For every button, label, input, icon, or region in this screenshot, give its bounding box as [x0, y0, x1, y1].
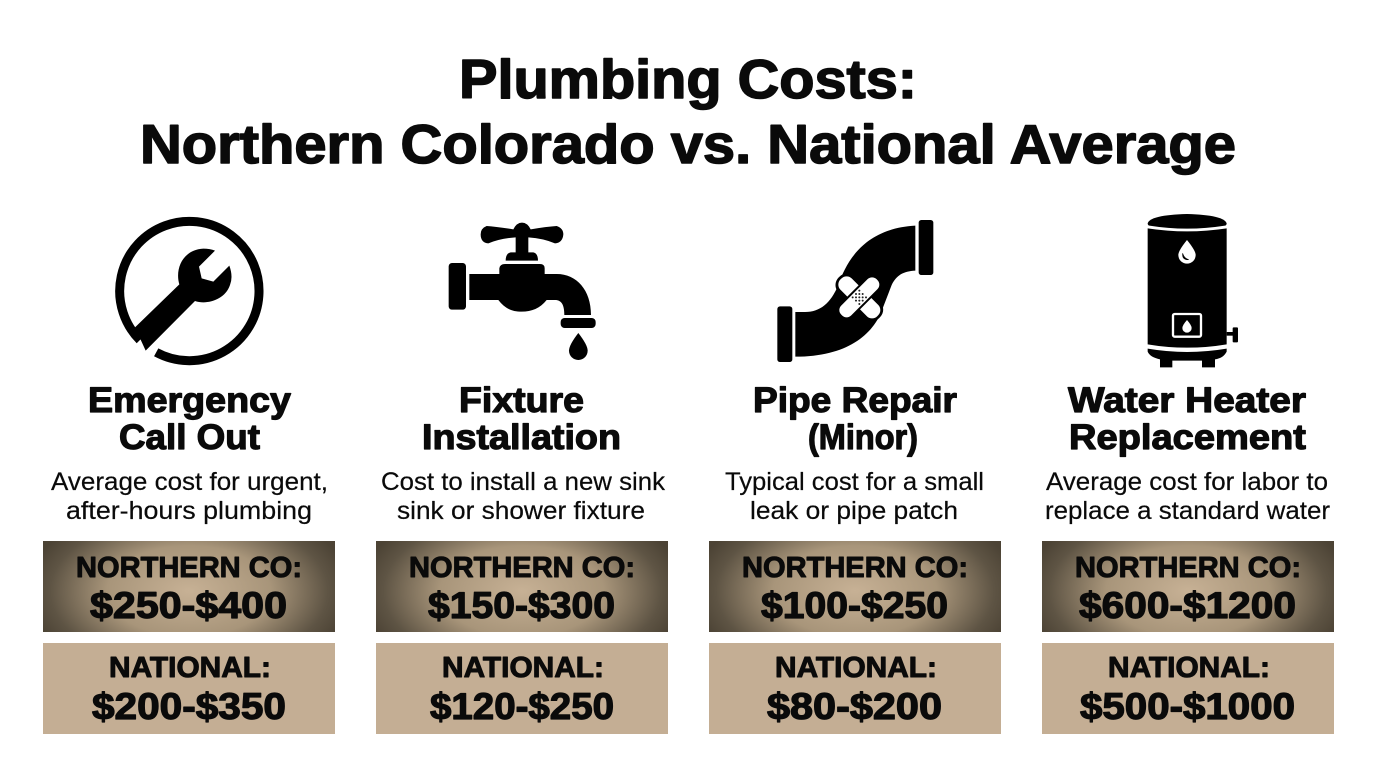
heading: fixture installation: Fixture: [459, 381, 584, 420]
icon: water heater: [1148, 214, 1238, 367]
northern co price: pipe repair: $100-$250: [761, 585, 948, 626]
national price: fixture: [376, 643, 668, 734]
northern co price: water heater: [1042, 541, 1334, 632]
heading: fixture installation: Installation: [422, 418, 621, 457]
description: water heater: Average cost for labor to: [1046, 468, 1328, 496]
northern co price: fixture: [376, 541, 668, 632]
description: water heater: [1045, 468, 1330, 525]
description: fixture: sink or shower fixture: [397, 497, 645, 525]
national price: pipe repair: $80-$200: [767, 686, 942, 727]
title: Plumbing Costs:: [459, 48, 917, 110]
heading: water heater replacement: [1068, 381, 1306, 457]
heading: emergency call out: [88, 381, 292, 457]
panel: pipe repair: [709, 220, 1001, 734]
heading: pipe repair: (Minor): [808, 418, 918, 457]
heading: emergency call out: Emergency: [88, 381, 292, 420]
national price: pipe repair: [709, 643, 1001, 734]
northern co price: pipe repair: NORTHERN CO:: [742, 552, 968, 584]
national price: pipe repair: NATIONAL:: [775, 652, 937, 684]
description: fixture: [381, 468, 666, 525]
heading: water heater replacement: Water Heater: [1068, 381, 1306, 420]
description: water heater: replace a standard water: [1045, 497, 1330, 525]
heading: emergency call out: Call Out: [119, 418, 260, 457]
northern co price: emergency: NORTHERN CO:: [76, 552, 302, 584]
northern co price: emergency: $250-$400: [90, 585, 287, 626]
icon: patched pipe: [777, 220, 933, 362]
panel: emergency call out: [43, 221, 335, 734]
description: fixture: Cost to install a new sink: [381, 468, 666, 496]
icon: wrench in circle: [120, 221, 259, 361]
description: pipe repair: [725, 468, 984, 525]
panel: water heater replacement: [1042, 214, 1334, 734]
heading: water heater replacement: Replacement: [1069, 418, 1306, 457]
heading: fixture installation: [422, 381, 621, 457]
northern co price: emergency: [43, 541, 335, 632]
title: Northern Colorado vs. National Average: [140, 113, 1236, 175]
description: pipe repair: Typical cost for a small: [725, 468, 984, 496]
description: emergency: [51, 468, 328, 525]
national price: emergency: NATIONAL:: [109, 652, 271, 684]
icon: dripping faucet: [449, 223, 596, 360]
national price: water heater: [1042, 643, 1334, 734]
northern co price: pipe repair: [709, 541, 1001, 632]
national price: water heater: $500-$1000: [1080, 686, 1295, 727]
northern co price: water heater: NORTHERN CO:: [1075, 552, 1301, 584]
panel: fixture installation: [376, 223, 668, 734]
national price: water heater: NATIONAL:: [1108, 652, 1270, 684]
national price: emergency: $200-$350: [92, 686, 286, 727]
heading: pipe repair: [753, 381, 957, 457]
northern co price: fixture: NORTHERN CO:: [409, 552, 635, 584]
northern co price: fixture: $150-$300: [428, 585, 615, 626]
northern co price: water heater: $600-$1200: [1079, 585, 1296, 626]
national price: emergency: [43, 643, 335, 734]
national price: fixture: NATIONAL:: [442, 652, 604, 684]
description: emergency: Average cost for urgent,: [51, 468, 328, 496]
title: [140, 48, 1236, 175]
description: emergency: after-hours plumbing: [66, 497, 312, 525]
description: pipe repair: leak or pipe patch: [750, 497, 958, 525]
national price: fixture: $120-$250: [430, 686, 614, 727]
heading: pipe repair: Pipe Repair: [753, 381, 957, 420]
